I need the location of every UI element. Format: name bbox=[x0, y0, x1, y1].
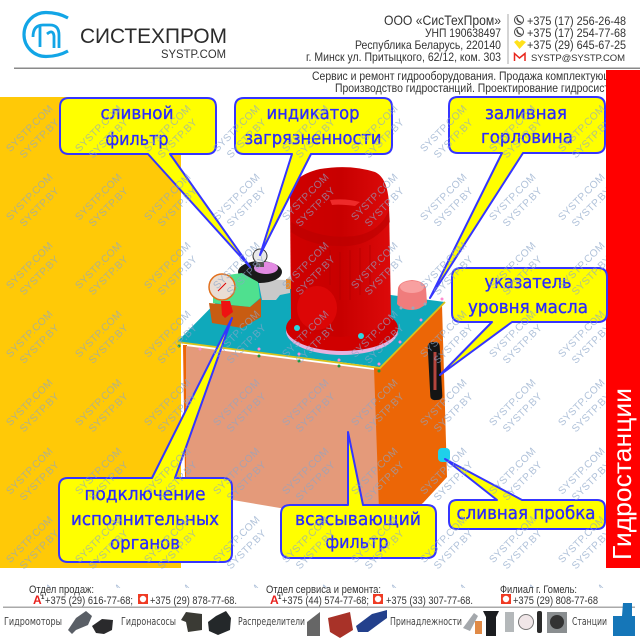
suction line housing bbox=[258, 276, 291, 300]
contacts: sales: 1 bbox=[41, 595, 45, 601]
valve green block bbox=[213, 273, 260, 307]
contacts: service: +375 (33) 307-77-68. bbox=[386, 595, 473, 607]
tank right face bbox=[374, 305, 447, 520]
product nav bbox=[4, 603, 635, 638]
callout: заливная горловина: заливная bbox=[485, 103, 567, 124]
nav: Гидронасосы: Гидронасосы bbox=[121, 615, 176, 628]
icon: phone 2 bbox=[514, 28, 524, 36]
panel: yellow background bbox=[0, 97, 181, 568]
pressure gauge bbox=[209, 274, 235, 300]
phone numbers: SYSTP@SYSTP.COM bbox=[531, 53, 625, 64]
contacts: Gomel branch bbox=[500, 584, 598, 607]
logo wordmark bbox=[80, 25, 227, 61]
callout: подключение исполнительных органов: исполнительных bbox=[71, 509, 219, 530]
contacts: sales: Отдел продаж: bbox=[29, 584, 94, 596]
nav: Принадлежности: Принадлежности bbox=[390, 615, 462, 628]
watermark bbox=[0, 97, 606, 588]
callout: заливная горловина: горловина bbox=[481, 127, 573, 148]
contacts: service: +375 (44) 574-77-68; bbox=[282, 595, 369, 607]
callout: сливной фильтр bbox=[60, 98, 250, 267]
panel: red side band bbox=[606, 70, 640, 568]
logo wordmark: SYSTP.COM bbox=[161, 47, 226, 61]
nav: Станции: Станции bbox=[572, 615, 607, 628]
callout: сливная пробка: сливная пробка bbox=[456, 503, 596, 524]
services text bbox=[312, 71, 623, 95]
logo wordmark: СИСТЕХПРОМ bbox=[80, 25, 227, 48]
terminal box bbox=[297, 286, 337, 330]
callout: сливной фильтр: сливной bbox=[100, 103, 174, 124]
sight glass bbox=[427, 342, 443, 400]
icon: yellow heart bbox=[514, 40, 526, 49]
footer contacts bbox=[29, 584, 598, 607]
company details: УНП 190638497 bbox=[425, 26, 501, 40]
hydraulic station bbox=[177, 167, 450, 525]
callout: указатель уровня масла: указатель bbox=[484, 272, 572, 293]
contacts: service: Отдел сервиса и ремонта: bbox=[266, 584, 381, 596]
callout: всасывающий фильтр: всасывающий bbox=[295, 509, 421, 530]
callout: всасывающий фильтр bbox=[281, 432, 436, 558]
contacts: service: 1 bbox=[278, 595, 282, 601]
contact details bbox=[514, 16, 626, 64]
callout: всасывающий фильтр: фильтр bbox=[326, 532, 388, 553]
callout: индикатор загрязненности: индикатор bbox=[266, 103, 360, 124]
callout: указатель уровня масла: уровня масла bbox=[468, 297, 588, 318]
contacts: sales: A bbox=[33, 593, 42, 607]
callout: указатель уровня масла bbox=[440, 268, 607, 375]
contacts: service: A bbox=[270, 593, 279, 607]
phone numbers bbox=[527, 16, 626, 64]
connection brown block bbox=[209, 298, 261, 328]
callout: подключение исполнительных органов: органов bbox=[110, 533, 180, 554]
tank top plate bbox=[177, 276, 445, 372]
motor flange bbox=[286, 305, 398, 355]
icon: mail bbox=[514, 54, 525, 61]
company details: ООО «СисТехПром» bbox=[384, 12, 501, 28]
logo icon bbox=[24, 12, 68, 57]
callout: подключение исполнительных органов bbox=[59, 318, 232, 562]
contacts: Gomel branch: +375 (29) 808-77-68 bbox=[513, 595, 598, 607]
contacts: sales bbox=[29, 584, 237, 607]
nav: Распределители: Распределители bbox=[238, 615, 305, 628]
contacts: sales: +375 (29) 878-77-68. bbox=[150, 595, 237, 607]
nav: Принадлежности bbox=[390, 611, 567, 636]
contacts: sales: +375 (29) 616-77-68; bbox=[45, 595, 133, 607]
contamination indicator bbox=[253, 249, 267, 263]
contacts: Gomel branch: Филиал г. Гомель: bbox=[500, 584, 577, 596]
red handle bbox=[221, 301, 233, 318]
nav: Станции bbox=[572, 603, 635, 636]
drain plug bbox=[438, 448, 450, 462]
callout: сливная пробка bbox=[445, 459, 605, 529]
callout: подключение исполнительных органов: подключение bbox=[84, 484, 206, 505]
icon: phone 1 bbox=[514, 16, 524, 24]
return filter head bbox=[238, 249, 282, 283]
phone numbers: +375 (29) 645-67-25 bbox=[527, 40, 626, 52]
motor bbox=[290, 167, 391, 339]
nav: Гидромоторы: Гидромоторы bbox=[4, 615, 62, 628]
company details: Республика Беларусь, 220140 bbox=[355, 38, 501, 52]
callout: индикатор загрязненности bbox=[235, 98, 392, 255]
callout: сливной фильтр: фильтр bbox=[106, 129, 168, 150]
phone numbers: +375 (17) 256-26-48 bbox=[527, 16, 626, 28]
nav: Гидромоторы bbox=[4, 611, 113, 634]
filler cap bbox=[397, 280, 427, 310]
tank left edge bbox=[183, 345, 189, 478]
tank front face bbox=[186, 346, 380, 525]
company details bbox=[306, 12, 501, 64]
callout: индикатор загрязненности: загрязненности bbox=[244, 128, 382, 149]
phone numbers: +375 (17) 254-77-68 bbox=[527, 28, 626, 40]
company details: г. Минск ул. Притыцкого, 62/12, ком. 303 bbox=[306, 50, 501, 64]
panel: red side band: Гидростанции bbox=[607, 388, 637, 560]
contacts: service bbox=[266, 584, 473, 607]
callout: заливная горловина bbox=[430, 97, 605, 298]
nav: Распределители bbox=[238, 610, 387, 638]
nav: Гидронасосы bbox=[121, 611, 231, 635]
